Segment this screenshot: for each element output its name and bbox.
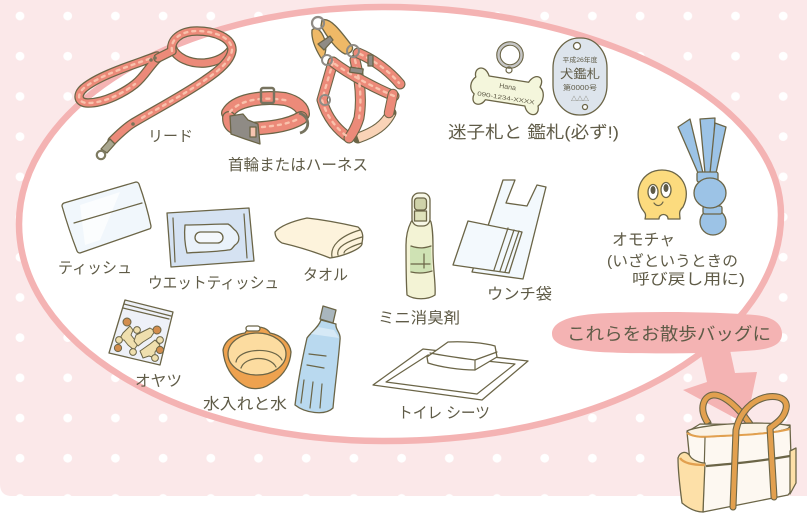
icon: bone name tag: Hana <box>499 83 516 92</box>
icon: mini deodorizer spray <box>406 193 435 299</box>
icon: dog license tag: 第0000号 <box>563 83 597 92</box>
label: wet wipes: ウエットティッシュ <box>148 274 279 292</box>
icon: tissue <box>62 182 151 253</box>
icon: bone name tag <box>468 44 546 116</box>
label: collar or harness: 首輪またはハーネス <box>228 156 368 174</box>
icon: bone name tag: 090-1234-XXXX <box>477 91 535 106</box>
icon: water bottle <box>295 306 340 413</box>
label: toilet sheet: トイレ シーツ <box>398 405 490 422</box>
side pockets <box>678 452 705 512</box>
label: toy note line 1: (いざというときの <box>607 252 738 270</box>
label: lead: リード <box>148 128 193 145</box>
icon: snack bag <box>109 300 173 365</box>
label: mini deodorizer: ミニ消臭剤 <box>378 309 460 327</box>
label: poop bags: ウンチ袋 <box>487 285 552 303</box>
label: lost-dog tag and license: 迷子札と 鑑札(必ず!) <box>448 123 619 142</box>
icon: water bowl <box>223 326 291 389</box>
icon: dog license tag <box>553 38 607 115</box>
back handle <box>703 395 750 424</box>
icon: toilet sheet <box>373 342 528 400</box>
icon: harness <box>312 17 400 138</box>
callout: put these in the walk bag: これらをお散歩バッグに <box>567 324 771 344</box>
icon: poop bags <box>453 180 546 279</box>
label: toy note line 2: 呼び戻し用に) <box>632 271 745 288</box>
label: towel: タオル <box>303 266 348 284</box>
icon: wet wipes <box>167 208 254 267</box>
panel: pink oval <box>19 7 781 441</box>
icon: tote bag <box>678 395 796 512</box>
label: toy: オモチャ <box>612 232 675 249</box>
label: tissue: ティッシュ <box>58 260 132 277</box>
icon: dog license tag: 犬鑑札 <box>560 66 600 81</box>
icon: towel <box>275 218 363 258</box>
bag body <box>687 424 792 512</box>
icon: dog license tag: △△△ <box>571 95 589 103</box>
label: snacks: オヤツ <box>135 373 182 390</box>
icon: toy skull <box>638 170 686 219</box>
icon: leash <box>79 31 232 159</box>
label: water bowl and water: 水入れと水 <box>203 395 288 413</box>
icon: rope toy <box>678 118 726 235</box>
callout: put these in the walk bag <box>552 312 782 353</box>
arrow: down to bag <box>683 350 757 424</box>
front handle <box>733 397 786 507</box>
icon: dog license tag: 平成26年度 <box>562 55 598 64</box>
icon: collar <box>228 88 308 144</box>
